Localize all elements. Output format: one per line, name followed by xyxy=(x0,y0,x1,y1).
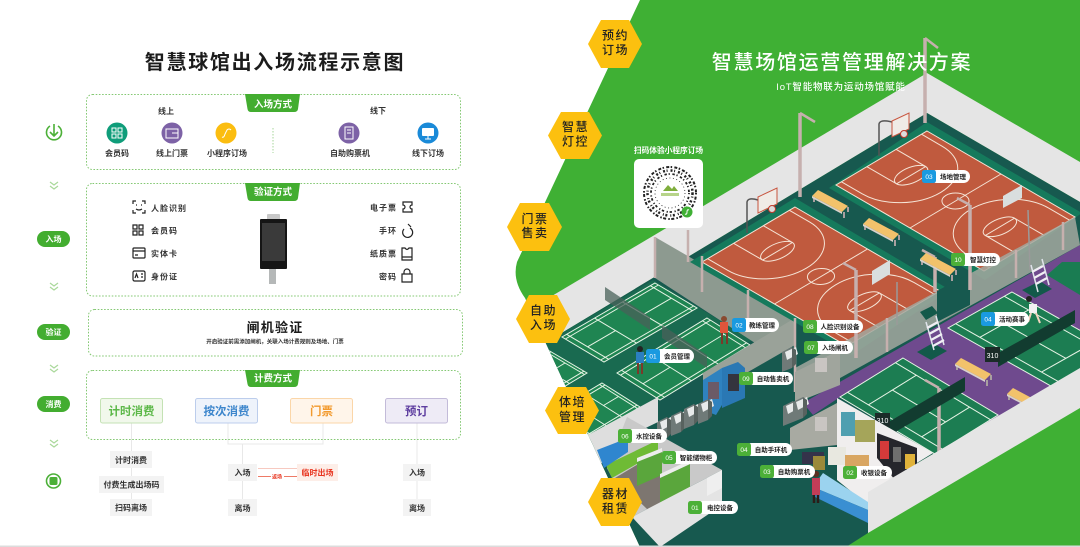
floor xyxy=(525,113,1080,547)
label: 08 人脸识别设备: 人脸识别设备 xyxy=(820,322,860,331)
right methods: 电子票 xyxy=(370,202,397,212)
label: 09 自动售卖机 xyxy=(739,372,793,385)
hexagon: 自助入场: 自助 xyxy=(530,304,557,318)
online label: 线上 xyxy=(158,106,174,116)
icon: 自助购票机 xyxy=(330,122,370,158)
hexagon: 智慧灯控 xyxy=(548,112,602,159)
label: 02 收银设备: 02 xyxy=(846,470,854,477)
left methods xyxy=(133,201,187,282)
basketball court 2 xyxy=(702,207,940,346)
court margin xyxy=(829,122,1080,280)
tab heading: 验证方式 xyxy=(254,186,292,198)
court margin 2 xyxy=(690,198,944,341)
label: 01 会员管理: 会员管理 xyxy=(664,352,690,360)
label: 02 收银设备: 收银设备 xyxy=(861,468,888,477)
steps: 计时消费: 扫码离场 xyxy=(115,502,147,512)
offline label: 线下 xyxy=(370,106,386,116)
right title: 智慧场馆运营管理解决方案 xyxy=(712,51,972,74)
chevron 2 xyxy=(50,283,58,290)
label: 07 入场闸机: 入场闸机 xyxy=(822,343,848,352)
hexagon: 器材租赁 xyxy=(588,478,642,526)
icon: 线下订场: 线下订场 xyxy=(412,148,444,158)
steps: 按次消费 and 门票 xyxy=(228,464,338,516)
steps: 预订: 离场 xyxy=(409,503,425,513)
left methods: 会员码 xyxy=(151,226,178,236)
label: 03 场地管理: 03 xyxy=(925,174,933,181)
equipment room xyxy=(588,397,722,547)
label: 02 收银设备 xyxy=(843,466,892,479)
icon: 会员码 xyxy=(105,122,129,158)
left methods: 人脸识别 xyxy=(151,203,187,213)
QR logo xyxy=(661,185,679,196)
purple zone xyxy=(807,245,1080,426)
hexagon: 智慧灯控: 智慧 xyxy=(562,119,589,134)
button: 按次消费: 按次消费 xyxy=(204,404,250,418)
label: 05 智能储物柜: 智能储物柜 xyxy=(680,453,713,462)
button: 计时消费: 计时消费 xyxy=(108,404,155,418)
label: 04 活动赛事 xyxy=(981,312,1029,326)
hoops xyxy=(747,113,1030,325)
label: 09 自动售卖机: 09 xyxy=(742,376,750,383)
icon: 小程序订场 xyxy=(207,122,247,158)
label: 04 活动赛事: 活动赛事 xyxy=(999,314,1026,324)
chevron 1 xyxy=(50,182,58,189)
panel: 验证方式 xyxy=(86,183,460,296)
label: 02 教练管理: 教练管理 xyxy=(749,320,776,330)
label: 02 教练管理 xyxy=(732,318,779,332)
label: 01 会员管理: 01 xyxy=(649,354,657,360)
hexagon: 自助入场 xyxy=(516,295,570,343)
QR mini-program badge xyxy=(682,206,692,218)
right subtitle: IoT智能物联为运动场馆赋能 xyxy=(776,81,906,93)
tennis court B xyxy=(948,292,1080,390)
steps: 计时消费: 计时消费 xyxy=(115,455,147,465)
benches xyxy=(812,190,1030,403)
button: 按次消费 xyxy=(196,398,258,423)
hexagon: 门票售卖 xyxy=(507,203,562,251)
pill: 消费: 消费 xyxy=(46,399,62,409)
label: 05 智能储物柜: 05 xyxy=(665,455,673,462)
label: 10 智慧灯控 xyxy=(951,253,1000,266)
steps: 按次消费 and 门票: 入场 xyxy=(234,468,250,478)
tab heading xyxy=(245,94,300,112)
steps: 按次消费 and 门票: 离场 xyxy=(234,503,250,513)
badminton court 2 xyxy=(617,318,750,400)
button: 预订 xyxy=(386,398,448,423)
label: 04 自助手环机: 自助手环机 xyxy=(755,445,788,454)
scoreboards: 310 xyxy=(987,353,998,360)
hexagon: 自助入场: 入场 xyxy=(530,318,557,332)
steps: 按次消费 and 门票: 返场 xyxy=(272,474,282,480)
pill: 消费 xyxy=(37,396,70,412)
hexagon: 门票售卖: 售卖 xyxy=(521,225,549,240)
fence: right xyxy=(796,217,1080,378)
right methods: 纸质票 xyxy=(370,248,397,258)
green background shape xyxy=(516,0,1080,547)
net: tennis A xyxy=(888,377,965,432)
badminton court 1 xyxy=(562,283,697,362)
device: face recognition terminal xyxy=(260,214,287,284)
tennis court top right xyxy=(1047,262,1080,295)
label: 02 教练管理: 02 xyxy=(735,322,743,330)
steps: 计时消费: 付费生成出场码 xyxy=(104,480,160,490)
steps: 计时消费 xyxy=(99,451,164,516)
fence: back left xyxy=(655,237,795,345)
badminton court 3 xyxy=(549,350,588,386)
hexagon: 预约订场: 预约 xyxy=(602,28,629,42)
left title: 智慧球馆出入场流程示意图 xyxy=(145,50,405,74)
net: tennis B xyxy=(998,310,1075,367)
icon: 线上门票: 线上门票 xyxy=(156,148,188,158)
icon: 自助购票机: 自助购票机 xyxy=(330,148,370,158)
tab heading xyxy=(245,183,300,201)
hexagon: 体培管理: 管理 xyxy=(559,409,586,424)
tab heading: 计费方式 xyxy=(254,372,292,384)
hexagon: 预约订场 xyxy=(588,20,642,68)
QR code card: 扫码体验小程序订场 xyxy=(634,145,703,155)
pill: 入场 xyxy=(37,231,70,247)
pill: 验证: 验证 xyxy=(46,327,62,337)
hexagon: 预约订场: 订场 xyxy=(602,43,629,57)
hexagon: 体培管理 xyxy=(545,387,599,434)
divider xyxy=(272,128,274,153)
stadium scene xyxy=(498,38,1080,547)
hexagon: 门票售卖: 门票 xyxy=(521,212,549,226)
badminton zone xyxy=(530,280,752,435)
net: badminton 1 xyxy=(605,287,650,330)
label: 04 活动赛事: 04 xyxy=(984,316,992,324)
scoreboards: 310 xyxy=(877,418,888,425)
label: 01 电控设备: 电控设备 xyxy=(707,503,734,512)
label: 07 入场闸机 xyxy=(804,341,853,354)
flow sidebar xyxy=(37,124,70,488)
label: 09 自动售卖机: 自动售卖机 xyxy=(757,374,790,383)
heading: 闸机验证 xyxy=(247,320,303,335)
icon: 线下订场 xyxy=(412,122,444,158)
steps: 预订 xyxy=(403,464,431,516)
label: 08 人脸识别设备 xyxy=(803,320,863,333)
bottom strip xyxy=(0,546,1080,547)
label: 05 智能储物柜 xyxy=(662,451,717,464)
steps: 按次消费 and 门票: 临时出场 xyxy=(302,468,334,478)
icon: 小程序订场: 小程序订场 xyxy=(207,148,247,158)
right methods xyxy=(370,202,413,282)
icon: 线上门票 xyxy=(156,122,188,158)
icon: stop xyxy=(46,474,60,488)
pill: 验证 xyxy=(37,324,70,340)
label: 01 电控设备 xyxy=(688,501,738,514)
description: 开启验证前需添加闸机，关联入场计费规则及场地、门票 xyxy=(206,338,344,346)
label: 01 电控设备: 01 xyxy=(691,505,699,512)
label: 07 入场闸机: 07 xyxy=(807,345,815,352)
scoreboards xyxy=(875,347,1000,427)
left methods: 身份证 xyxy=(151,272,178,282)
label: 03 自助购票机: 自助购票机 xyxy=(778,467,811,476)
button: 门票: 门票 xyxy=(310,404,333,418)
label: 04 自助手环机 xyxy=(737,443,792,456)
dark doorway xyxy=(937,273,970,322)
panel: 计费方式 xyxy=(86,370,460,440)
players xyxy=(636,296,1040,374)
label: 06 水控设备 xyxy=(618,429,667,443)
label: 03 场地管理: 场地管理 xyxy=(940,172,966,181)
QR dot rings xyxy=(644,167,696,219)
posts xyxy=(655,38,1063,452)
shop xyxy=(802,398,933,505)
label: 03 自助购票机 xyxy=(760,465,815,478)
button: 门票 xyxy=(290,398,352,423)
label: 04 自助手环机: 04 xyxy=(740,447,748,454)
panel: 闸机验证 xyxy=(88,310,462,356)
icon: entry arrow xyxy=(46,124,62,140)
label: 03 场地管理 xyxy=(922,170,970,183)
wall: front right xyxy=(868,368,1080,533)
label: 01 会员管理 xyxy=(646,349,694,363)
tab heading: 入场方式 xyxy=(254,98,292,110)
panel: 入场方式 xyxy=(86,94,460,170)
label: 10 智慧灯控: 智慧灯控 xyxy=(970,255,996,264)
button: 预订: 预订 xyxy=(405,405,428,418)
net: badminton 2 xyxy=(662,325,707,368)
left methods: 实体卡 xyxy=(151,248,178,258)
right methods: 密码 xyxy=(379,272,397,282)
basketball court 1 xyxy=(836,131,1075,271)
hexagon: 器材租赁: 租赁 xyxy=(602,500,629,516)
fence: mid xyxy=(703,320,794,380)
button: 计时消费 xyxy=(100,398,162,423)
hexagon: 智慧灯控: 灯控 xyxy=(562,134,589,148)
pill: 入场: 入场 xyxy=(46,234,62,244)
tennis court A xyxy=(840,358,998,454)
vending machines xyxy=(703,362,745,415)
gates: front row xyxy=(657,399,714,442)
chevron 3 xyxy=(50,365,58,372)
icon: 会员码: 会员码 xyxy=(105,148,129,158)
gates: right rows xyxy=(782,347,840,450)
umpire chairs xyxy=(917,259,1052,360)
hexagon: 器材租赁: 器材 xyxy=(602,487,629,501)
tab heading xyxy=(245,370,300,387)
label: 08 人脸识别设备: 08 xyxy=(806,324,814,331)
wall: back left xyxy=(530,73,927,343)
hexagon: 体培管理: 体培 xyxy=(559,394,586,409)
wall: back right xyxy=(927,73,1080,202)
connector lines xyxy=(132,423,417,500)
label: 06 水控设备: 水控设备 xyxy=(636,432,662,440)
right methods: 手环 xyxy=(379,226,397,236)
counter xyxy=(812,471,868,523)
label: 06 水控设备: 06 xyxy=(621,434,629,440)
steps: 预订: 入场 xyxy=(409,468,425,478)
badminton court 4 xyxy=(587,382,640,437)
QR code card xyxy=(634,145,703,228)
label: 10 智慧灯控: 10 xyxy=(954,257,962,264)
label: 03 自助购票机: 03 xyxy=(763,469,771,476)
chevron 4 xyxy=(50,440,58,447)
